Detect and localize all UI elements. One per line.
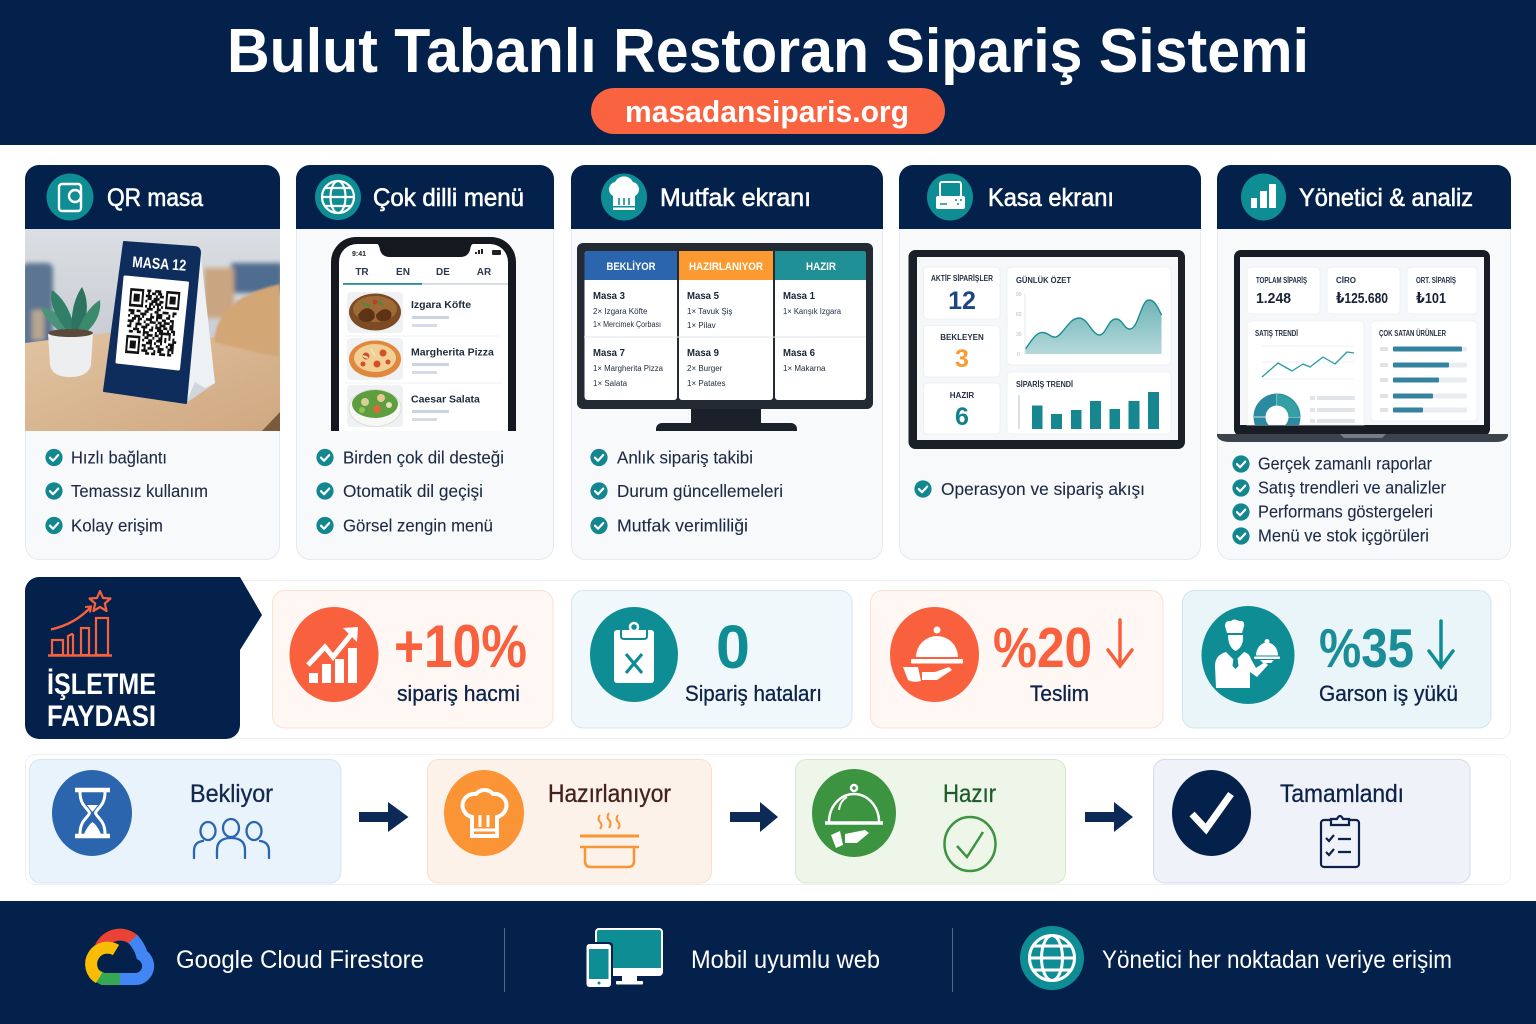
feature list: Otomatik dil geçişi — [343, 481, 483, 501]
illustration: POS dashboard — [908, 250, 1185, 449]
feature list: Kolay erişim — [71, 516, 163, 536]
feature list: Satış trendleri ve analizler — [1258, 478, 1446, 498]
url pill — [591, 88, 945, 134]
step: Hazır: Hazır — [943, 780, 996, 808]
benefits band — [25, 577, 1510, 739]
benefits tab: FAYDASI — [47, 700, 156, 733]
food: salad — [349, 390, 401, 426]
illustration: phone menu: EN — [396, 267, 410, 278]
stat: order volume: sipariş hacmi — [397, 681, 520, 706]
icon: check circle — [944, 817, 996, 871]
illustration: phone menu: 9:41 — [352, 251, 366, 258]
step: Tamamlandı — [1154, 760, 1470, 883]
divider — [504, 928, 506, 992]
feature list — [316, 448, 504, 536]
feature list: Operasyon ve sipariş akışı — [941, 479, 1145, 499]
header band — [0, 0, 1536, 145]
panel: QR masa — [22, 165, 282, 560]
feature list: Hızlı bağlantı — [71, 448, 167, 468]
illustration: laptop dashboard: 1.248 — [1256, 290, 1291, 307]
illustration: laptop dashboard: ₺125.680 — [1336, 290, 1388, 307]
illustration: kitchen display: 1× Karışık Izgara — [783, 307, 842, 316]
illustration: laptop dashboard: ₺101 — [1416, 290, 1446, 307]
icon: chef hat — [601, 174, 647, 220]
illustration: laptop dashboard: SATIŞ TRENDİ — [1255, 329, 1298, 338]
tab label: İŞLETME — [47, 668, 156, 701]
illustration: POS dashboard: 6 — [955, 403, 969, 431]
illustration: phone menu: Izgara Köfte — [411, 299, 471, 311]
feature list: Gerçek zamanlı raporlar — [1258, 454, 1432, 474]
stat: order volume: +10% — [394, 613, 527, 680]
illustration: POS dashboard: 90 — [1016, 292, 1022, 298]
benefits tab — [25, 577, 262, 739]
icon: steaming pot — [580, 813, 639, 867]
illustration: kitchen display: 1× Mercimek Çorbası — [593, 320, 661, 329]
feature list — [590, 448, 783, 536]
icon: bar chart — [1241, 174, 1286, 220]
plant — [41, 287, 100, 377]
icon: people — [194, 819, 269, 858]
label: Yönetici her noktadan veriye erişim — [1102, 946, 1452, 974]
illustration: kitchen display: HAZIR — [806, 261, 836, 273]
illustration: POS dashboard: 60 — [1016, 312, 1022, 318]
stat: waiter workload: %35 — [1319, 617, 1414, 679]
stat: waiter workload — [1182, 590, 1491, 728]
footer band — [0, 901, 1536, 1024]
title: Bulut Tabanlı Restoran Sipariş Sistemi — [227, 17, 1309, 86]
heading: Çok dilli menü — [373, 184, 524, 212]
icon: growth with star — [48, 591, 112, 656]
feature list: Anlık sipariş takibi — [617, 448, 753, 468]
illustration: kitchen display — [577, 243, 873, 431]
heading: Mutfak ekranı — [660, 184, 811, 212]
step: Hazırlanıyor — [428, 760, 712, 883]
icon: checklist — [1321, 816, 1359, 867]
illustration: table tent with QR code — [22, 229, 282, 431]
illustration: kitchen display: 2× Izgara Köfte — [593, 307, 648, 316]
illustration: kitchen display: 1× Margherita Pizza — [593, 364, 664, 373]
icon: phone QR — [46, 174, 94, 220]
icon: globe — [1020, 926, 1084, 990]
illustration: kitchen display: Masa 1 — [783, 290, 815, 302]
illustration: POS dashboard: AKTİF SİPARİŞLER — [931, 274, 993, 283]
label: Google Cloud Firestore — [176, 946, 424, 974]
illustration: laptop dashboard: CİRO — [1336, 276, 1356, 285]
illustration: laptop dashboard: ORT. SİPARİŞ — [1416, 276, 1457, 285]
url pill: masadansiparis.org — [625, 94, 909, 129]
stat: order errors: 0 — [716, 613, 750, 681]
stat: order volume — [272, 590, 553, 728]
illustration: POS dashboard: 0 — [1017, 352, 1020, 358]
illustration: kitchen display: 2× Burger — [687, 364, 723, 373]
panel: Çok dilli menü — [296, 165, 554, 560]
illustration: kitchen display: 1× Makarna — [783, 364, 826, 373]
illustration: POS dashboard: GÜNLÜK ÖZET — [1016, 276, 1071, 285]
illustration: kitchen display: Masa 9 — [687, 347, 719, 359]
illustration: kitchen display: Masa 7 — [593, 347, 625, 359]
illustration: phone menu — [331, 237, 516, 431]
step: Bekliyor — [30, 760, 341, 883]
feature list: Durum güncellemeleri — [617, 481, 783, 501]
feature list — [1232, 454, 1446, 546]
illustration: laptop dashboard: ÇOK SATAN ÜRÜNLER — [1379, 329, 1446, 338]
heading: Kasa ekranı — [988, 184, 1114, 212]
stat: order errors: Sipariş hataları — [685, 681, 822, 706]
step: Bekliyor: Bekliyor — [190, 780, 273, 808]
illustration: phone menu: DE — [436, 267, 450, 278]
icon: responsive devices — [585, 929, 662, 989]
icon: Google Cloud — [91, 935, 148, 979]
order flow band — [26, 754, 1510, 884]
label: Mobil uyumlu web — [691, 946, 880, 974]
illustration: kitchen display: 1× Pilav — [687, 321, 716, 330]
stat: waiter workload: Garson iş yükü — [1319, 681, 1458, 706]
heading: QR masa — [107, 184, 203, 212]
stat: delivery: Teslim — [1030, 681, 1089, 706]
step: Hazır — [796, 760, 1066, 883]
heading: Yönetici & analiz — [1299, 184, 1473, 212]
icon: globe — [315, 174, 361, 220]
illustration: kitchen display: Masa 5 — [687, 290, 719, 302]
illustration: kitchen display: Masa 3 — [593, 290, 625, 302]
feature list: Görsel zengin menü — [343, 516, 493, 536]
illustration: laptop dashboard: TOPLAM SİPARİŞ — [1256, 276, 1308, 285]
feature list: Birden çok dil desteği — [343, 448, 504, 468]
stat: order errors — [572, 590, 852, 728]
food: köfte — [349, 294, 401, 330]
illustration: phone menu: Caesar Salata — [411, 394, 480, 406]
illustration: POS dashboard: HAZIR — [950, 391, 974, 400]
panel: Kasa ekranı — [899, 165, 1201, 560]
illustration: kitchen display: Masa 6 — [783, 347, 815, 359]
illustration: kitchen display: HAZIRLANIYOR — [689, 261, 763, 273]
panel: Mutfak ekranı — [571, 165, 883, 560]
illustration: kitchen display: BEKLİYOR — [606, 260, 656, 273]
illustration: kitchen display: 1× Tavuk Şiş — [687, 307, 732, 316]
feature list: Menü ve stok içgörüleri — [1258, 526, 1429, 546]
feature list — [45, 448, 208, 536]
stat: delivery: %20 — [993, 616, 1092, 680]
icon: cash register — [927, 174, 973, 220]
food: pizza — [349, 340, 401, 378]
divider — [952, 928, 954, 992]
arrow — [730, 802, 778, 832]
arrow — [1085, 802, 1133, 832]
illustration: POS dashboard: 3 — [955, 345, 969, 373]
illustration: POS dashboard: BEKLEYEN — [940, 333, 984, 342]
panel: Yönetici & analiz — [1217, 165, 1511, 560]
illustration: laptop dashboard — [1217, 250, 1508, 442]
illustration: phone menu: TR — [355, 267, 369, 278]
table number: MASA 12 — [132, 254, 187, 275]
feature list: Performans göstergeleri — [1258, 502, 1433, 522]
feature list: Mutfak verimliliği — [617, 516, 748, 536]
step: Hazırlanıyor: Hazırlanıyor — [548, 780, 671, 808]
arrow — [359, 802, 408, 832]
illustration: POS dashboard: 12 — [948, 287, 976, 315]
illustration: phone menu: Margherita Pizza — [411, 346, 494, 358]
step: Tamamlandı: Tamamlandı — [1280, 780, 1404, 808]
illustration: phone menu: AR — [477, 267, 492, 278]
stat: delivery — [870, 590, 1163, 728]
illustration: kitchen display: 1× Patates — [687, 379, 725, 388]
feature list: Temassız kullanım — [71, 481, 208, 501]
illustration: POS dashboard: 30 — [1016, 332, 1022, 338]
illustration: kitchen display: 1× Salata — [593, 379, 628, 388]
illustration: POS dashboard: SİPARİŞ TRENDİ — [1016, 380, 1073, 389]
